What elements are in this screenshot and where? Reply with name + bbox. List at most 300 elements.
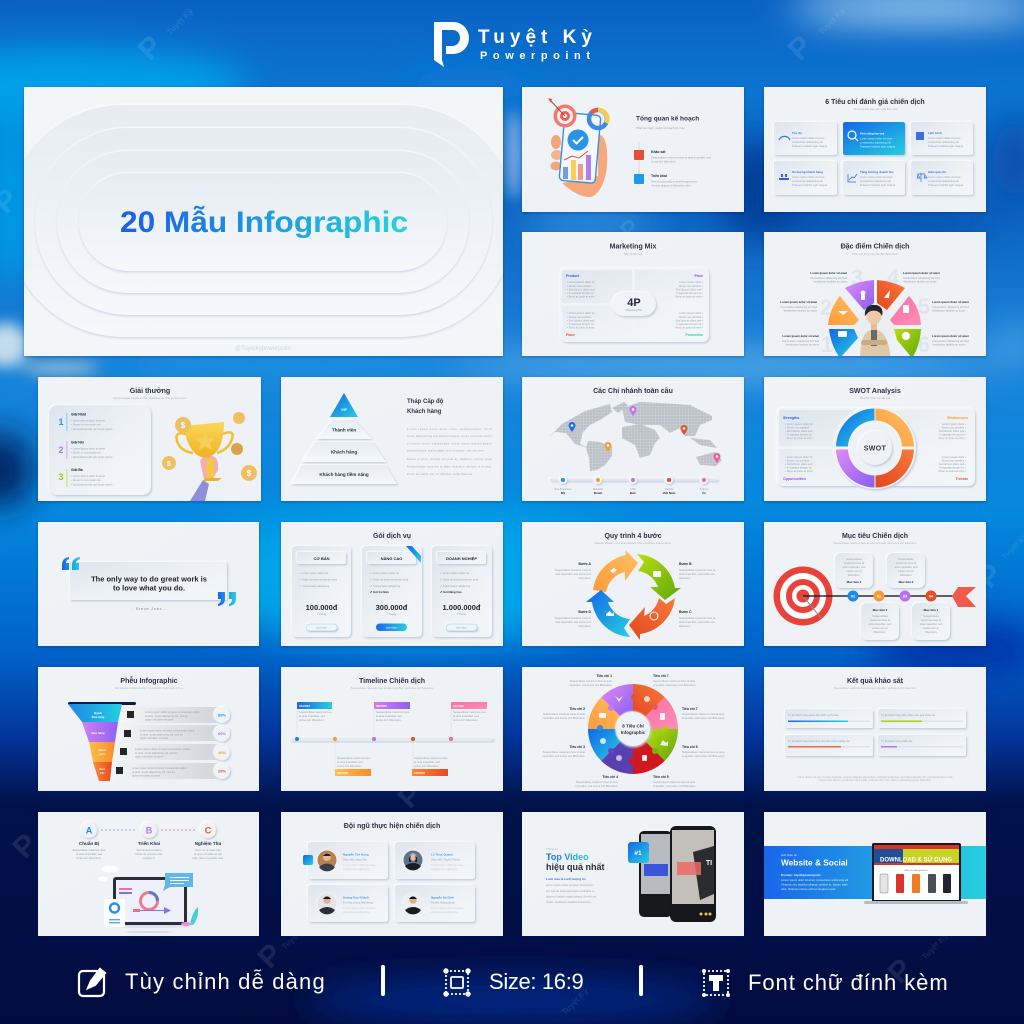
awards list: • Sed pulvinar elit, per turpis ipsum [71, 482, 113, 486]
criteria labels: imperdiet, sed luctus orci Bibendum [653, 784, 696, 788]
steps A B C [72, 822, 224, 860]
step labels: Bước A [579, 562, 592, 566]
feature: fonts: Font chữ đính kèm [748, 970, 948, 995]
card grid: Hiệu quả chi [928, 170, 946, 174]
timeline: at ante imperdiet, sed [376, 714, 402, 718]
heading: Mục tiêu Chiến dịch [842, 532, 908, 540]
heading: Timeline Chiến dịch [359, 677, 425, 685]
timeline [290, 702, 493, 776]
labels: Vestibulum facilisis ac turpis [784, 308, 818, 312]
timeline: luctus orci bibendum. [453, 718, 479, 722]
hero credit: @Tuyetkypowerpoint [235, 346, 291, 352]
card grid: consectetur adipiscing elit [792, 179, 823, 183]
timeline: luctus orci bibendum. [376, 718, 402, 722]
center badge 4P: Marketing Mix [626, 308, 643, 312]
laptop: DOWNLOAD & SỬ DỤNG [880, 856, 952, 864]
card grid: Số lượng khách hàng [792, 170, 823, 174]
team card 3 [308, 885, 388, 922]
sub heading: Suspendisse maximus risus at ante imperdiet, sed luctus orci bibendum [351, 686, 433, 690]
steps A B C: porttitor id. [143, 856, 156, 860]
heading: Thống kê [546, 847, 558, 851]
funnel bars: et ante, turpis adipiscing elit, sed do [145, 714, 188, 718]
steps A B C: tempus convallis ac nisi [194, 852, 223, 856]
pricing card: doanh nghiệp: Lựa chọn [456, 626, 468, 630]
SWOT matrix [777, 408, 975, 486]
separator [639, 965, 643, 996]
description: Lướt view & Lướt lượng tìn [546, 877, 586, 881]
location timeline: Úc [702, 490, 706, 495]
goal nodes: 03 [903, 594, 908, 598]
percent badges: 80% [218, 712, 226, 718]
opening quote mark [62, 557, 80, 570]
step labels: Suspendisse maximus risus at [679, 616, 716, 620]
labels [780, 271, 969, 346]
goal cards: Mục tiêu 3 [899, 580, 914, 584]
survey cards [785, 709, 966, 756]
team card 4: Lorem ipsum dolor sit amet [431, 906, 464, 910]
panel: top video [522, 812, 744, 936]
SWOT matrix: • In egestas tempor ex [785, 432, 812, 436]
4P matrix: • Donec nec porttitor [567, 315, 591, 319]
awards list: 2 [58, 445, 64, 455]
footnote: viverra nam dictum, vestibulum quis mollis, nulla ac nibh, nunc felis in, adipiscing ipsum bibendum [819, 778, 931, 782]
steps A B C: Chuẩn Bị [79, 840, 99, 846]
sub heading: Suspendisse maximus risus at ante imperdiet, sed luctus orci bibendum [834, 541, 916, 545]
SWOT matrix: Nunc ac justo at enim • [938, 436, 966, 440]
panel: quote [38, 522, 259, 646]
step labels: ante imperdiet, sed luctus orci [555, 620, 591, 624]
heading: Đội ngũ thực hiện chiến dịch [344, 822, 440, 830]
criteria labels: Tiêu chí 1 [596, 674, 612, 678]
illustration: hand with phone [548, 98, 607, 197]
pricing card: doanh nghiệp: DOANH NGHIỆP [446, 556, 477, 561]
step labels: Bước C [679, 610, 692, 614]
SWOT matrix: • Nunc ac justo at enim [785, 469, 813, 473]
awards list: 1 [58, 417, 64, 427]
heading: Gói dịch vụ [373, 533, 411, 540]
awards list: Giải Nhì [71, 440, 84, 444]
steps A B C: Sed tempus tincidunt [136, 848, 162, 852]
steps A B C: felis, risus at porttitor erat. [193, 856, 224, 860]
center badge 4P: 4P [627, 297, 641, 309]
timeline: Suspendisse maximus risus [299, 710, 333, 714]
pricing card: cơ bản: ✔ Dolor sit amet consecter prod [299, 578, 338, 582]
pricing card: cơ bản [292, 546, 351, 637]
heading [546, 847, 605, 872]
card grid: consectetur adipiscing elit [860, 140, 891, 144]
big numerals: 3 [851, 265, 863, 290]
pricing card: cơ bản: CƠ BẢN [313, 556, 330, 561]
card grid [774, 122, 973, 195]
phones [639, 826, 716, 922]
steps A B C: luctus orci bibendum. [76, 856, 102, 860]
4P matrix: Donec nec porttitor • [679, 315, 703, 319]
labels: Vestibulum facilisis ac turpis [786, 342, 820, 346]
SWOT matrix: • Nunc ac justo at enim [785, 436, 813, 440]
team card 4: Nguyễn Bá Đình [431, 896, 454, 900]
arrow [803, 587, 976, 607]
paragraph: Proin eu mollis est. Ut efficitur nulla rhoncus. [407, 472, 473, 476]
goal cards: Suspendisse [846, 557, 862, 561]
sub heading: Số lượng thời gian, tần suất, hiệu quả [853, 107, 897, 111]
steps A B C: A [86, 826, 93, 836]
steps A B C: lectus ac posuere odio [136, 852, 163, 856]
panel: marketing mix [522, 232, 744, 356]
4P matrix: • Sed dictum ullam sed [567, 318, 595, 322]
criteria labels: Suspendisse maximus risus at ante [653, 780, 696, 784]
steps A B C: Nghiệm Thu [195, 841, 221, 846]
card grid: Praesent facilisis eget magna [860, 183, 896, 187]
criteria labels: Suspendisse maximus risus at ante [543, 750, 585, 754]
icon: font [702, 969, 730, 997]
goal nodes: 02 [877, 594, 882, 598]
card grid: Lorem ipsum dolor sit amet [860, 136, 893, 140]
funnel: tâm [100, 752, 105, 756]
labels: Vestibulum facilisis ac turpis [903, 280, 937, 284]
wheel [828, 280, 921, 362]
funnel: Biết [99, 767, 105, 771]
goal cards [835, 553, 950, 640]
paragraph: Etiam in ante, dictum vel erat at, dapibus cursus vitae [407, 457, 492, 461]
4P matrix: • Lorem ipsum dolor sit [567, 311, 595, 315]
step labels: bibendum. [578, 624, 591, 628]
pricing card: cơ bản: ✔ Consectetur adipiscing [299, 584, 330, 588]
pyramid [291, 393, 397, 484]
criteria labels: Tiêu chí 4 [602, 775, 618, 779]
map pins [568, 406, 720, 463]
card grid: Lorem ipsum dolor sit amet [860, 175, 893, 179]
card grid: Praesent facilisis eget magna [860, 144, 896, 148]
pricing card: doanh nghiệp: ✔ Consectetur adipiscing [440, 584, 471, 588]
criteria labels: Tiêu chí 7 [682, 707, 698, 711]
location timeline: Salvador [593, 487, 603, 491]
4P matrix: Lorem ipsum dolor • [679, 311, 703, 315]
character [860, 304, 890, 356]
SWOT matrix: Nunc ac justo at enim • [938, 469, 966, 473]
goal cards: bibendum. [874, 630, 887, 634]
4P matrix: • Lorem ipsum dolor sit [567, 280, 595, 284]
goal cards: ante imperdiet, sed [895, 565, 918, 569]
timeline: 07/2023 [414, 771, 425, 775]
panel: mục tiêu chiến dịch [764, 522, 986, 646]
panel: chuẩn bị – triển khai – nghiệm thu [38, 812, 259, 936]
pyramid: Khách hàng [331, 450, 357, 454]
card grid: Lorem ipsum dolor sit amet [928, 136, 961, 140]
heading: Marketing Mix [610, 244, 656, 250]
step labels: bibendum. [578, 576, 591, 580]
awards list: • Lorem ipsum dolor sit amet [71, 446, 105, 450]
panel: gói dịch vụ [281, 522, 503, 646]
steps: Suspendisse maximus risus at ante imperdiet, sed [651, 156, 711, 160]
timeline: 03/2023 [376, 704, 387, 708]
illustration: trophy: $ [181, 421, 186, 430]
survey cards: Tỷ lệ khách hàng tiếp nhận web qua khóa sát [881, 713, 935, 717]
big numerals: 6 [918, 332, 930, 357]
description: minim, vestibulum facilisis fermentum. [546, 900, 592, 904]
criteria labels: Tiêu chí 2 [569, 707, 585, 711]
team card 3: Hoàng Duy Khánh [343, 896, 369, 900]
center label: Infographic [621, 730, 646, 735]
labels: Lorem ipsum dolor sit amet [780, 300, 817, 304]
SWOT matrix: • Donec nec porttitor [785, 458, 809, 462]
sub heading: Bảng tất phân tích kết quả [860, 396, 891, 400]
labels: Consectetur adipiscing elit Sed [932, 339, 969, 343]
heading: Các Chi nhánh toàn cầu [593, 386, 673, 395]
watermarks: Tuyệt Kỳ [560, 986, 590, 1016]
goal cards: maximus risus at [844, 561, 864, 565]
logo [434, 22, 592, 67]
criteria labels: Suspendisse maximus risus at ante [570, 679, 612, 683]
timeline: luctus orci bibendum. [337, 764, 363, 768]
awards list: • Lorem ipsum dolor sit amet [71, 474, 105, 478]
pricing card: doanh nghiệp: 1.000.000đ [443, 603, 481, 612]
description: Lorem ipsum dolor sit amet, consectetur [546, 883, 594, 887]
criteria labels [542, 674, 725, 788]
SWOT matrix: Lorem ipsum dolor • [942, 455, 966, 459]
pricing card: cơ bản: Lựa chọn [316, 626, 328, 630]
team card 3: Lorem ipsum dolor sit amet [343, 906, 376, 910]
heading: SWOT Analysis [849, 388, 901, 395]
separator [381, 965, 385, 996]
center label: 8 Tiêu Chí [622, 724, 644, 728]
brand sub: Powerpoint [480, 50, 590, 62]
goal cards: maximus risus at [921, 618, 941, 622]
author: - Steve Jobs - [132, 606, 166, 611]
timeline: at ante imperdiet, sed [337, 760, 363, 764]
survey cards: Tỷ lệ khách hàng thấp nay [881, 739, 913, 743]
heading: Tổng quan kế hoạch [636, 114, 699, 122]
goal cards: bibendum. [925, 630, 938, 634]
big numerals: 1 [821, 332, 833, 357]
illustration: trophy [162, 412, 257, 501]
feature: customise: Tùy chỉnh dễ dàng [125, 969, 325, 994]
criteria labels: Tiêu chí 3 [569, 745, 585, 749]
timeline: Suspendisse maximus risus [414, 756, 448, 760]
location timeline [550, 476, 718, 495]
paragraph [407, 427, 492, 476]
paragraph: Pellentesque quis leo at diam interdum ultrices in in erat. [407, 464, 492, 468]
panel: đặc điểm chiến dịch [764, 232, 986, 362]
steps A B C: Nunc at, ac eget odio [195, 848, 221, 852]
criteria labels: imperdiet, sed luctus orci Bibendum [682, 716, 725, 720]
panel: quy trình 4 bước [522, 522, 744, 646]
awards list [49, 405, 151, 495]
awards list: Giải Nhất [71, 412, 87, 416]
pricing card: nâng cao: ✔ Dolor sit amet consecter prod [370, 578, 409, 582]
pricing card: nâng cao: ✔ Lorem ipsum dolor sit [370, 571, 399, 575]
band text: Vivamus nec dapibus aliquam pretium in, dictum vitae [781, 882, 848, 886]
heading: Quy trình 4 bước [604, 533, 662, 540]
funnel: Tới [100, 771, 104, 775]
funnel bars: et ante, turpis adipiscing elit, sed do [135, 751, 178, 755]
timeline: 02/2023 [337, 771, 348, 775]
panel: giải thưởng [38, 377, 261, 501]
goal cards: bibendum. [848, 573, 861, 577]
big numerals [820, 265, 930, 357]
pyramid: Thành viên [332, 428, 356, 432]
steps A B C: Suspendisse maximus risus [72, 848, 106, 852]
steps A B C: B [146, 826, 153, 836]
labels: Lorem ipsum dolor sit amet [782, 334, 819, 338]
rank tile [628, 842, 649, 863]
steps A B C: C [205, 826, 212, 836]
panel: 8 tiêu chí [522, 667, 744, 791]
percent badges: 60% [218, 731, 226, 736]
card grid: Lorem ipsum dolor sit amet [792, 175, 825, 179]
band text: Domain: tuyetkypowerpoint [781, 873, 821, 877]
blue band [764, 846, 986, 899]
4P matrix: • Donec nec porttitor [567, 284, 591, 288]
panel: đội ngũ [281, 812, 503, 936]
puzzle wheel [588, 684, 678, 774]
quote box [70, 562, 227, 600]
illustration: dashboard [98, 866, 198, 933]
pricing card: cơ bản: 100.000đ [306, 603, 338, 612]
criteria labels: imperdiet, sed luctus orci Bibendum [569, 683, 613, 687]
4P matrix: Nunc ac justo at enim • [675, 294, 703, 298]
SWOT matrix: Sed dictum ullam sed • [939, 462, 966, 466]
sub heading: Tiếp thị hỗn hợp [624, 251, 643, 256]
SWOT matrix: • Lorem ipsum dolor sit [785, 455, 813, 459]
panel: timeline chiến dịch [281, 667, 503, 791]
team card 2: Lorem ipsum dolor sit amet [431, 863, 464, 867]
SWOT matrix: • In egestas tempor ex [785, 466, 812, 470]
steps A B C: Triển Khai [138, 840, 160, 846]
steps: Khảo sát [651, 150, 666, 154]
goal cards: ante imperdiet, sed [920, 622, 943, 626]
location timeline: Aïdin [630, 487, 637, 491]
band text: Giới thiệu về [781, 853, 797, 857]
goal cards: Mục tiêu 1 [847, 580, 862, 584]
band text [781, 853, 849, 891]
SWOT matrix: In egestas tempor ex • [939, 466, 966, 470]
pricing card: doanh nghiệp: ✔ Dolor sit amet consecter prod [440, 578, 479, 582]
funnel [68, 702, 136, 781]
labels: Consectetur adipiscing elit Sed [932, 305, 969, 309]
step labels [555, 562, 716, 628]
SWOT matrix: Lorem ipsum dolor • [942, 422, 966, 426]
team card 1 [308, 842, 388, 879]
team card 4: consectetur adipiscing [431, 910, 458, 914]
4P matrix: • Nunc ac justo at enim [567, 326, 595, 330]
pricing card: nâng cao: ✔ Gói Cơ Bản [370, 590, 389, 594]
funnel bars [110, 707, 225, 779]
goal cards: maximus risus at [896, 561, 916, 565]
criteria labels: Suspendisse maximus risus at ante [682, 750, 725, 754]
goal cards: Suspendisse [898, 557, 914, 561]
step labels: bibendum. [679, 624, 692, 628]
SWOT matrix: • Lorem ipsum dolor sit [785, 422, 813, 426]
4P matrix: Price [694, 274, 703, 278]
heading: 6 Tiêu chí đánh giá chiến dịch [825, 98, 925, 106]
laptop: Mẫu tải xuống phổ biến [905, 869, 928, 872]
pyramid: VIP [341, 408, 347, 412]
goal cards: luctus orci at [923, 626, 939, 630]
labels: Vestibulum facilisis ac turpis [932, 342, 966, 346]
feature: size: Size: 16:9 [489, 969, 584, 994]
step labels: Bước B [679, 562, 692, 566]
panel: phễu infographic [38, 667, 259, 791]
timeline: at ante imperdiet, sed [414, 760, 440, 764]
labels: Consectetur adipiscing elit Sed [810, 276, 847, 280]
card grid: Praesent facilisis eget magna [928, 183, 964, 187]
labels: Vestibulum facilisis ac turpis [814, 280, 848, 284]
pricing card: nâng cao: Lựa chọn [386, 626, 398, 630]
funnel: Mua hàng [91, 731, 105, 735]
card grid: Lorem ipsum dolor sit amet [928, 175, 961, 179]
4P matrix: Product [566, 274, 580, 278]
card grid: Khả năng lan toả [860, 132, 884, 136]
funnel bars: Lorem ipsum dolor sit amet consectetur adipis [140, 728, 195, 732]
funnel bars: Lorem ipsum dolor sit amet consectetur adipis [135, 747, 190, 751]
goal nodes: 01 [851, 594, 856, 598]
card grid: consectetur adipiscing elit [792, 140, 823, 144]
sub heading: Phần tóm lược, muốn nói hoạch tìm hiểu [636, 126, 685, 130]
awards list: 3 [58, 472, 64, 482]
percent badges: 40% [218, 750, 226, 755]
team card 1: Lorem ipsum dolor sit amet [343, 863, 376, 867]
SWOT matrix: In egestas tempor ex • [939, 432, 966, 436]
step labels: ante imperdiet, sed luctus orci [555, 572, 591, 576]
icon: P mark [434, 22, 469, 67]
SWOT donut: SWOT [864, 446, 887, 452]
steps A B C: at ante imperdiet, sed [76, 852, 102, 856]
watermarks: P [252, 937, 289, 975]
awards list: • Sed pulvinar elit, per turpis ipsum [71, 455, 113, 459]
SWOT matrix: • Donec nec porttitor [785, 426, 809, 430]
steps: Sed id porta nulla at amet feugiat risus. [651, 180, 698, 184]
heading: Giải thưởng [130, 388, 170, 395]
heading: Top Video [546, 852, 589, 862]
labels: Lorem ipsum dolor sit amet [932, 334, 969, 338]
pricing card: doanh nghiệp: ✔ Gói Nâng Cao [440, 590, 462, 594]
funnel bars: quam nisl diam sit amet [132, 774, 160, 778]
band text: Lorem ipsum dolor sit amet, consectetur adipiscing elit [781, 878, 849, 882]
labels: Vestibulum facilisis ac turpis [932, 308, 966, 312]
4P matrix: Nunc ac justo at enim • [675, 326, 703, 330]
panel: kết quả khảo sát [764, 667, 986, 791]
location timeline: Sydney [700, 487, 709, 491]
panel: website & social [764, 812, 986, 936]
timeline: luctus orci bibendum. [414, 764, 440, 768]
team card 2: Lê Thúy Quỳnh [431, 852, 453, 856]
goal cards: Suspendisse [923, 614, 939, 618]
4P matrix: • Nunc ac justo at enim [567, 294, 595, 298]
watermarks: P [782, 29, 819, 67]
timeline: at ante imperdiet, sed [299, 714, 325, 718]
SWOT matrix: Donec nec porttitor • [942, 458, 966, 462]
footnote [797, 775, 953, 782]
pricing card: nâng cao: 300.000đ [376, 603, 408, 612]
watermarks: P [972, 557, 1009, 595]
watermarks: Tuyệt Kỳ [165, 6, 195, 36]
criteria labels: Tiêu chí 7 [653, 674, 669, 678]
SWOT matrix: Sed dictum ullam sed • [939, 429, 966, 433]
team card 3: Trưởng phòng Marketing [343, 900, 373, 904]
card grid: consectetur adipiscing elit [860, 179, 891, 183]
goal cards: Mục tiêu 4 [924, 608, 939, 612]
timeline: luctus orci bibendum. [299, 718, 325, 722]
description: elit, sed do eiusmod tempor incididunt ut [546, 889, 594, 893]
sub heading: Maecen aliquam, at ut lorem blandit, nibh vestibulum erat purus ac [595, 541, 672, 545]
card grid: Tốc độ [792, 131, 802, 135]
awards list: • Donec in commodo nisi [71, 478, 101, 482]
rank tile: #1 [634, 850, 642, 857]
footer [79, 965, 948, 997]
location timeline: San Francisco [554, 487, 572, 491]
awards list: Giải Ba [71, 468, 83, 472]
band text: odio. Vivamus cursus orci leo feugiat et quis. [781, 887, 837, 891]
